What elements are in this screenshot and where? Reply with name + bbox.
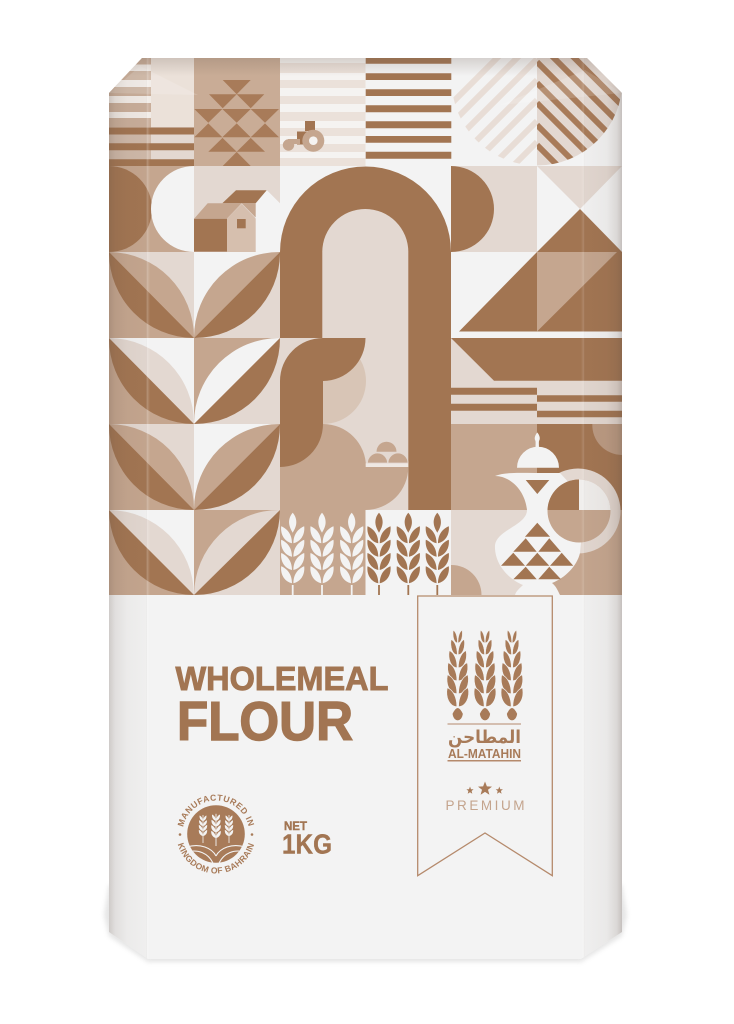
icon: house (194, 190, 267, 252)
pattern panel: dark stripes tile (366, 58, 451, 159)
logo wheat (447, 630, 523, 721)
pot lid (517, 432, 559, 468)
hook shape (280, 338, 366, 467)
badge field lines (190, 845, 242, 862)
logo rule bottom (448, 760, 521, 762)
badge upper text: MANUFACTURED IN (178, 794, 254, 827)
pattern panel: coffee pot backdrop (451, 424, 622, 595)
title line 1: WHOLEMEAL (176, 660, 388, 697)
pattern panel: striped tile, top left (109, 58, 194, 166)
pot body (495, 473, 585, 595)
pattern panel: white wheat on tan (280, 510, 366, 595)
pattern panel: farmhouse tile (194, 166, 280, 252)
icon: arabic coffee pot (495, 432, 620, 595)
bag shadow (104, 885, 627, 962)
pattern panel: half circle on light (451, 166, 537, 252)
pot triangle pattern (501, 480, 573, 579)
ribbon label (418, 596, 552, 876)
badge wheat (199, 814, 233, 846)
logo arabic name: المطاحن (448, 727, 521, 748)
icon: bread loaves in bowl (366, 442, 408, 467)
logo rule top (448, 724, 521, 725)
ribbon outline (418, 596, 552, 876)
bag base (280, 58, 622, 338)
weight value: 1KG (282, 828, 332, 859)
pattern panel: half circle and bowl (280, 359, 408, 510)
pot handle (559, 468, 620, 554)
pattern panel: leaf row 1 (109, 252, 280, 338)
pattern panel: boat sail (459, 252, 622, 332)
front label area (105, 595, 625, 961)
premium label: PREMIUM (446, 798, 524, 813)
top fold highlights (110, 70, 614, 100)
badge lower text: KINGDOM OF BAHRAIN (178, 842, 254, 874)
pattern panel: leaf row 2 (109, 338, 280, 424)
pattern panel: triangle pair tile (537, 166, 622, 252)
title line 2: FLOUR (177, 690, 353, 752)
badge disc (187, 805, 245, 863)
net label: NET (284, 821, 307, 833)
pattern panel: woven triangles tile (194, 58, 280, 166)
pattern panel: diagonal striped circle (454, 58, 622, 166)
badge dots (179, 833, 253, 836)
manufactured badge (178, 794, 254, 874)
pattern panel: brown wheat on white (366, 510, 451, 595)
arch (280, 166, 451, 510)
net weight (282, 821, 332, 859)
icon: tractor (283, 121, 324, 152)
pot window (548, 479, 610, 542)
pattern panel: light backdrop inside the arch (280, 209, 408, 510)
pattern panel: leaf row 4 (109, 510, 280, 595)
logo latin name: AL-MATAHIN (448, 746, 521, 761)
pattern panel: striped field with tractor (280, 58, 366, 166)
stars (466, 782, 503, 795)
pattern panel: circle and half circle tile (109, 166, 194, 252)
top edge shading (130, 58, 598, 72)
pattern panel: boat hull and stripes (451, 338, 622, 424)
pattern panel: leaf row 3 (109, 424, 280, 510)
product title (176, 660, 388, 752)
flour bag (109, 58, 622, 959)
side shading (105, 55, 625, 961)
